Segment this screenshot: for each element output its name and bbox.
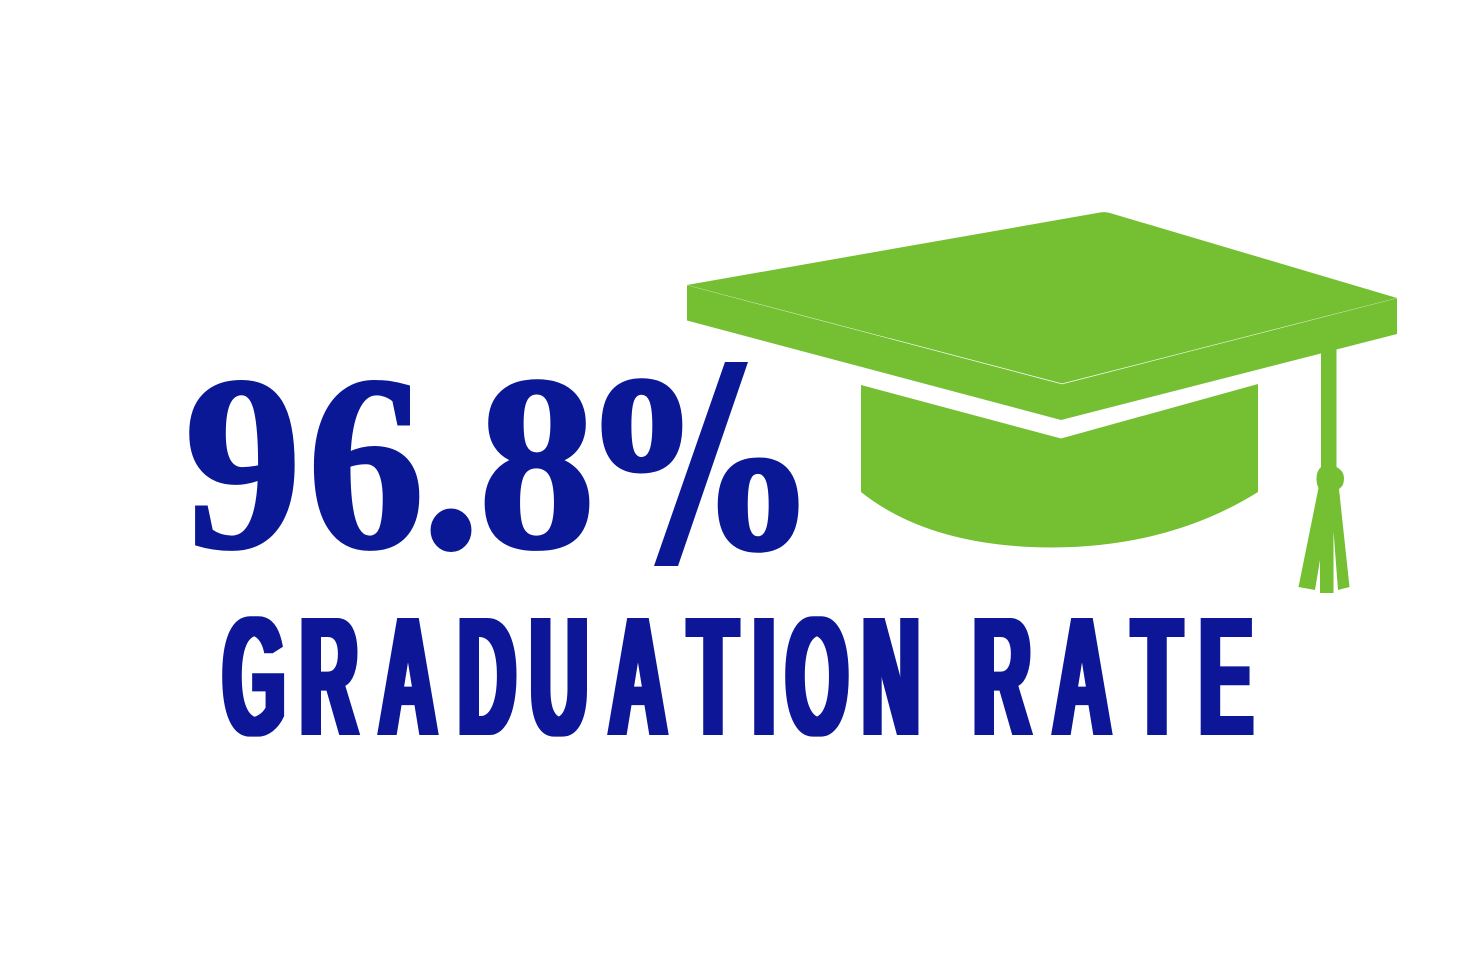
tassel xyxy=(1298,346,1350,593)
digits: 96.8 xyxy=(184,325,596,602)
cap board front edge xyxy=(687,285,1397,420)
infographic xyxy=(189,212,1397,737)
statistic: 96.8% xyxy=(189,362,799,566)
percent rings: % xyxy=(579,324,819,601)
label: graduation rate: GRADUATION RATE xyxy=(223,583,1253,772)
icon: graduation cap xyxy=(687,212,1397,593)
cap body xyxy=(861,384,1258,548)
cap top board xyxy=(687,212,1397,384)
percent slash xyxy=(654,362,748,566)
